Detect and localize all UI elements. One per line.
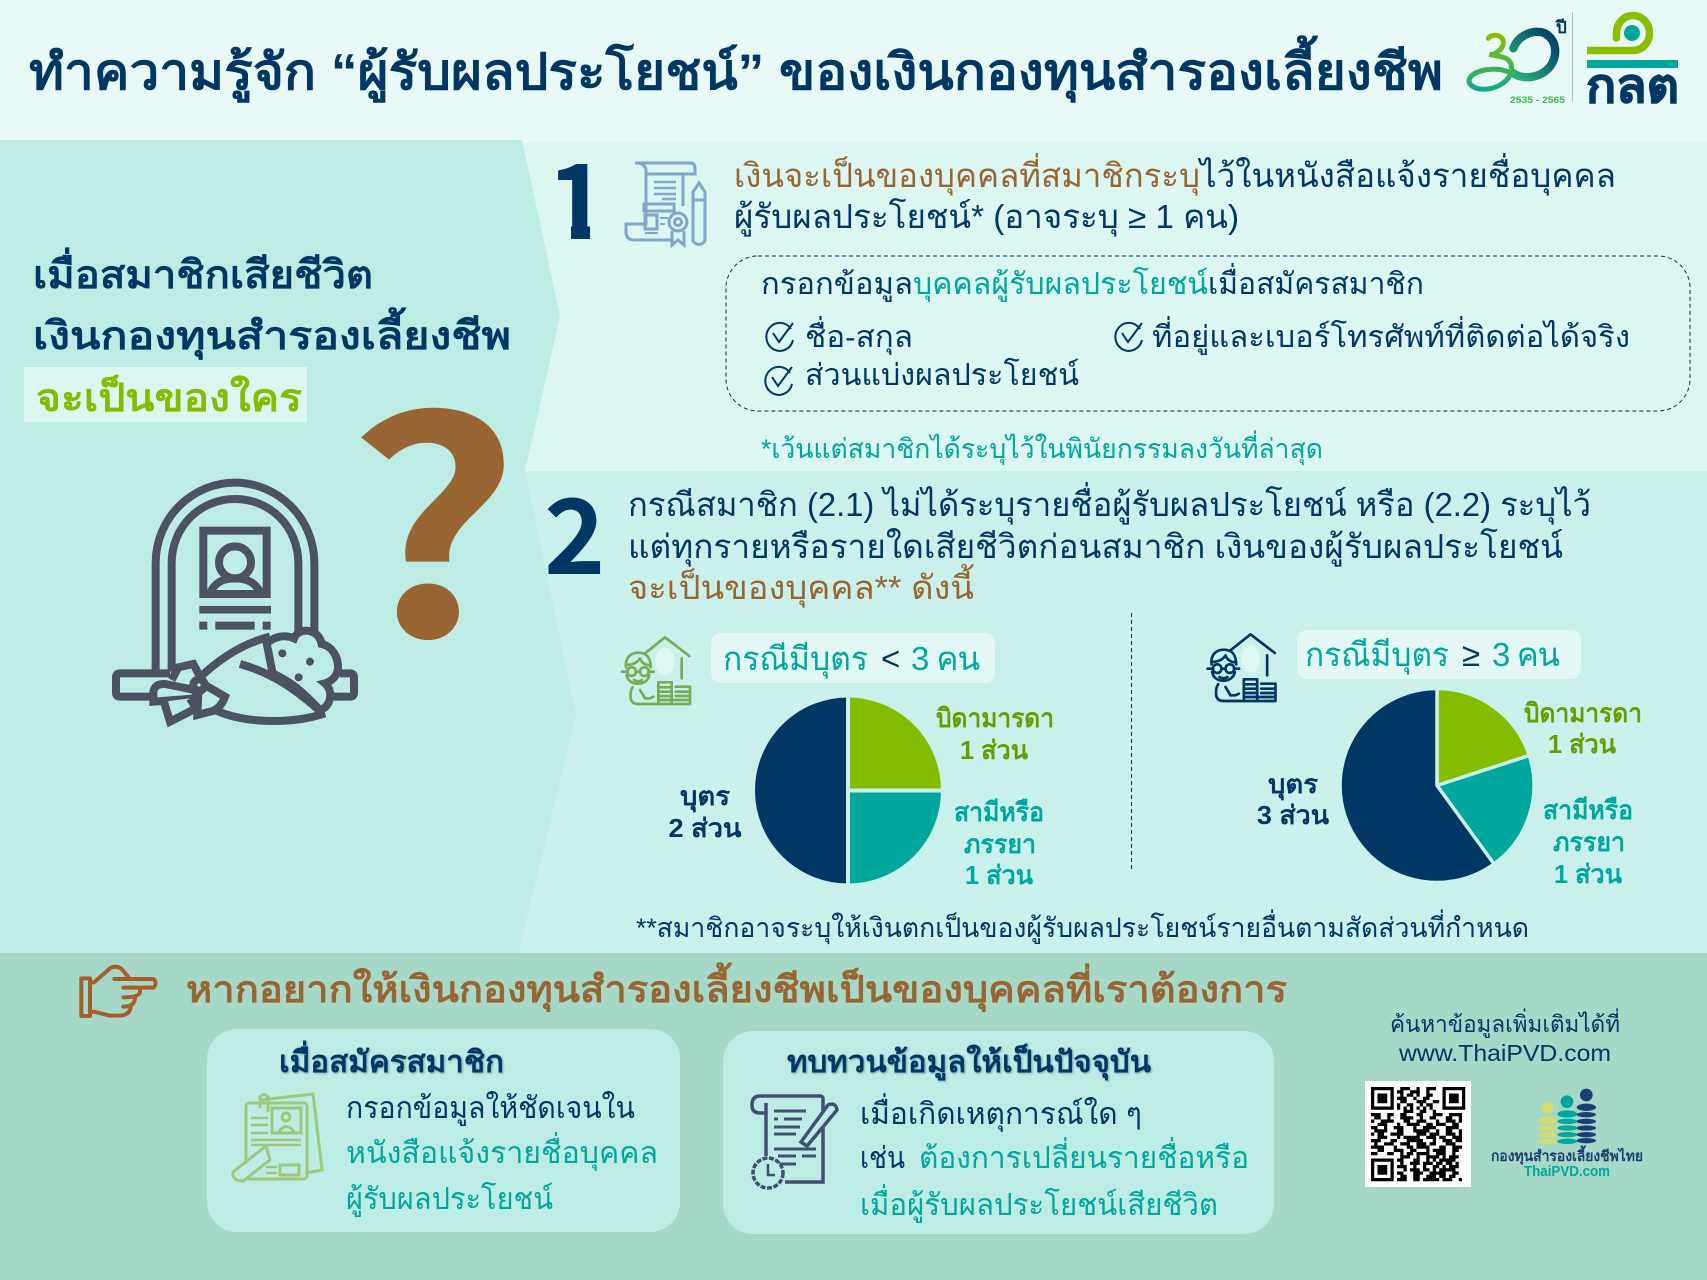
pie labels: case 2: ภรรยา bbox=[1553, 827, 1625, 857]
case 1 pill: 3 คน bbox=[911, 640, 980, 677]
left heading bbox=[24, 247, 511, 422]
card: when applying bbox=[207, 1029, 680, 1232]
pie labels: case 2: 1 ส่วน bbox=[1554, 859, 1622, 889]
title: ทำความรู้จัก “ผู้รับผลประโยชน์” ของเงินกองทุนสำรองเลี้ยงชีพ bbox=[29, 35, 1443, 103]
pie labels: case 2: บุตร bbox=[1268, 769, 1318, 801]
icon: form with pencil bbox=[233, 1094, 322, 1181]
logo divider bbox=[1572, 12, 1574, 102]
pie labels: case 1: ภรรยา bbox=[964, 829, 1036, 859]
logo: SEC: กลต bbox=[1586, 59, 1679, 112]
more info text: ค้นหาข้อมูลเพิ่มเติมได้ที่ bbox=[1390, 1008, 1620, 1038]
pie labels: case 1: 2 ส่วน bbox=[668, 813, 742, 843]
bottom heading: หากอยากให้เงินกองทุนสำรองเลี้ยงชีพเป็นของบุคคลที่เราต้องการ bbox=[186, 962, 1287, 1013]
card text: ผู้รับผลประโยชน์ bbox=[346, 1181, 553, 1217]
icon: pointing hand bbox=[81, 967, 156, 1016]
pie labels: case 1: บิดามารดา bbox=[936, 703, 1054, 733]
card text: ต้องการเปลี่ยนรายชื่อหรือ bbox=[919, 1137, 1249, 1175]
panel: left question panel bbox=[0, 140, 576, 955]
panel: section 2 background bbox=[500, 471, 1707, 955]
more info text bbox=[1390, 1008, 1620, 1066]
more info text: www.ThaiPVD.com bbox=[1398, 1040, 1611, 1066]
pie chart: children fewer than 3 bbox=[753, 696, 943, 886]
case 1 pill bbox=[711, 633, 995, 683]
case 1 pill: < bbox=[881, 640, 900, 677]
logo: Thai PVD fund: ThaiPVD.com bbox=[1524, 1164, 1610, 1180]
card text: เช่น bbox=[860, 1142, 905, 1175]
case 2 pill: กรณีมีบุตร bbox=[1305, 636, 1449, 675]
pie labels: case 2: บิดามารดา bbox=[1524, 698, 1642, 728]
section 2 statement: จะเป็นของบุคคล** ดังนี้ bbox=[628, 564, 975, 608]
info box heading: บุคคลผู้รับผลประโยชน์ bbox=[913, 266, 1208, 303]
pie labels: case 2: 1 ส่วน bbox=[1548, 729, 1616, 759]
icon: document with pen and clock bbox=[752, 1096, 837, 1188]
pie labels: case 1: 1 ส่วน bbox=[960, 735, 1028, 765]
panel: bottom band bbox=[0, 953, 1707, 1280]
icon: person with house and coins (green) bbox=[622, 637, 690, 704]
number 2: 2 bbox=[544, 453, 605, 604]
logo: Thai PVD fund bbox=[1491, 1089, 1643, 1180]
section 1 statement: ไว้ในหนังสือแจ้งรายชื่อบุคคล bbox=[1197, 153, 1616, 196]
left heading: เมื่อสมาชิกเสียชีวิต bbox=[33, 247, 373, 297]
section 1 statement bbox=[734, 153, 1616, 237]
section 2 statement: กรณีสมาชิก (2.1) ไม่ได้ระบุรายชื่อผู้รับผลประโยชน์ หรือ (2.2) ระบุไว้ bbox=[628, 482, 1591, 525]
left heading: เงินกองทุนสำรองเลี้ยงชีพ bbox=[33, 307, 511, 360]
info box heading: กรอกข้อมูล bbox=[761, 268, 913, 302]
panel: section 1 background bbox=[500, 143, 1707, 473]
section 1 statement: ผู้รับผลประโยชน์* (อาจระบุ ≥ 1 คน) bbox=[734, 198, 1239, 237]
icon: certificate scroll and pen bbox=[626, 163, 705, 245]
card text: กรอกข้อมูลให้ชัดเจนใน bbox=[346, 1091, 635, 1126]
info box heading bbox=[761, 263, 1424, 303]
card title: ทบทวนข้อมูลให้เป็นปัจจุบัน bbox=[787, 1043, 1151, 1081]
logo: Thai PVD fund: กองทุนสำรองเลี้ยงชีพไทย bbox=[1491, 1145, 1643, 1165]
icon: person with house and coins (navy) bbox=[1207, 634, 1275, 701]
check item: name bbox=[766, 316, 913, 356]
check item: share: ส่วนแบ่งผลประโยชน์ bbox=[805, 357, 1079, 392]
QR code bbox=[1365, 1081, 1471, 1187]
pie labels: case 1: สามีหรือ bbox=[954, 797, 1044, 827]
pie labels: case 2: 3 ส่วน bbox=[1257, 800, 1329, 830]
pie labels: case 1: บุตร bbox=[680, 781, 730, 813]
pie labels: case 1 bbox=[668, 703, 1054, 890]
card text bbox=[346, 1091, 658, 1217]
check item: address: ที่อยู่และเบอร์โทรศัพท์ที่ติดต่อได้จริง bbox=[1152, 316, 1630, 355]
footnote 2: **สมาชิกอาจระบุให้เงินตกเป็นของผู้รับผลประโยชน์รายอื่นตามสัดส่วนที่กำหนด bbox=[636, 909, 1529, 945]
check item: name: ชื่อ-สกุล bbox=[805, 316, 913, 356]
pie labels: case 2 bbox=[1257, 698, 1642, 889]
section 1 statement: เงินจะเป็นของบุคคลที่สมาชิกระบุ bbox=[734, 153, 1200, 196]
case 1 pill: กรณีมีบุตร bbox=[723, 640, 868, 679]
logo: SEC bbox=[1586, 16, 1679, 112]
card text: หนังสือแจ้งรายชื่อบุคคล bbox=[346, 1132, 658, 1172]
left heading: จะเป็นของใคร bbox=[36, 374, 302, 420]
logo: 30 years anniversary bbox=[1469, 17, 1567, 106]
number 1: 1 bbox=[547, 118, 608, 269]
info box heading: เมื่อสมัครสมาชิก bbox=[1208, 263, 1424, 301]
section 2 statement: แต่ทุกรายหรือรายใดเสียชีวิตก่อนสมาชิก เงินของผู้รับผลประโยชน์ bbox=[628, 528, 1563, 567]
card title: เมื่อสมัครสมาชิก bbox=[279, 1040, 504, 1079]
logo: 30 years anniversary: ปี bbox=[1555, 17, 1567, 37]
card text: เมื่อผู้รับผลประโยชน์เสียชีวิต bbox=[860, 1184, 1218, 1223]
card text bbox=[860, 1093, 1249, 1223]
dashed info box bbox=[726, 256, 1690, 411]
case 2 pill bbox=[1297, 630, 1581, 679]
section 2 statement bbox=[628, 482, 1591, 608]
footnote 1: *เว้นแต่สมาชิกได้ระบุไว้ในพินัยกรรมลงวันที่ล่าสุด bbox=[761, 430, 1323, 466]
pie labels: case 1: 1 ส่วน bbox=[965, 860, 1033, 890]
pie chart: children 3 or more bbox=[1340, 688, 1534, 882]
big question mark: ? bbox=[346, 294, 520, 721]
pie labels: case 2: สามีหรือ bbox=[1543, 795, 1633, 825]
logo: 30 years anniversary: 2535 - 2565 bbox=[1510, 95, 1566, 106]
divider between cases bbox=[1130, 613, 1132, 871]
card text: เมื่อเกิดเหตุการณ์ใด ๆ bbox=[860, 1093, 1142, 1133]
case 2 pill: ≥ bbox=[1462, 636, 1480, 673]
card: keep up to date bbox=[723, 1031, 1274, 1234]
icon: gravestone with bouquet bbox=[116, 483, 354, 722]
case 2 pill: 3 คน bbox=[1492, 636, 1560, 673]
header band bbox=[0, 0, 1707, 143]
